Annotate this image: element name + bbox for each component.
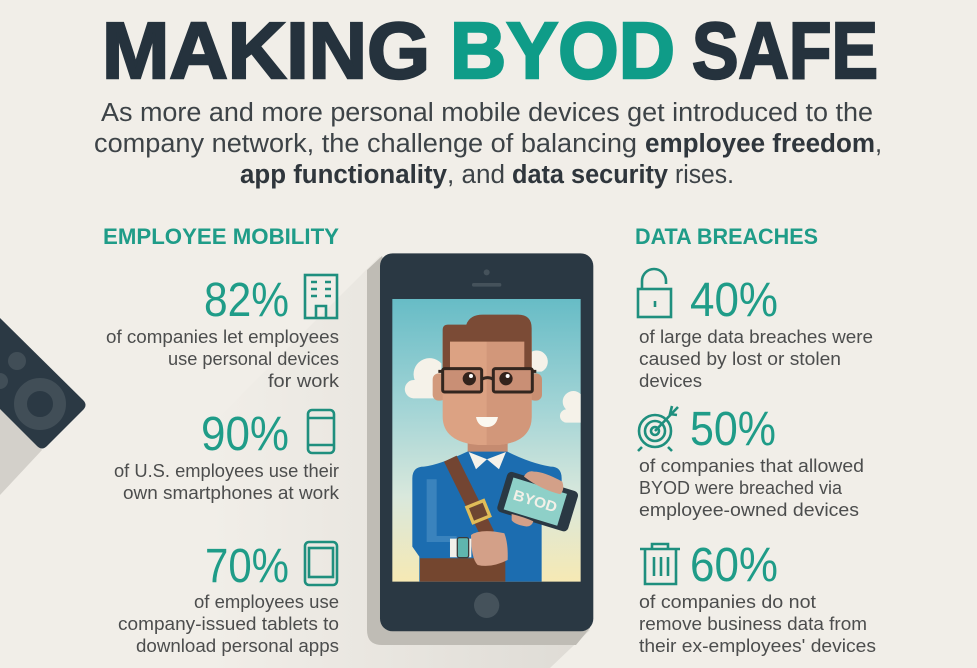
text: 70% description: company-issued tablets to: [118, 613, 339, 634]
smile: [476, 417, 498, 427]
stat: 40%: [638, 269, 873, 391]
hand and watch: [471, 531, 508, 566]
glasses: [438, 369, 536, 392]
heading: data breaches: DATA BREACHES: [635, 224, 818, 249]
stat: 50%: [638, 403, 864, 520]
text: 82% description: for work: [268, 370, 340, 391]
phone illustration: [380, 253, 593, 631]
intro text: app functionality: [240, 161, 448, 189]
stat: 90%: 90%: [201, 408, 289, 461]
text: 50% description: [639, 455, 864, 520]
text: 40% description: of large data breaches were: [639, 326, 873, 347]
strap: [444, 456, 494, 536]
text: 70% description: download personal apps: [136, 635, 339, 656]
sweater: [412, 452, 562, 582]
head: [443, 337, 532, 445]
shirt collar: [469, 452, 506, 469]
title: SAFE: [692, 6, 878, 95]
text: 70% description: of employees use: [194, 591, 339, 612]
hair: [443, 315, 532, 370]
text: 60% description: [639, 591, 876, 656]
small phone in hand: [496, 471, 579, 533]
text: 50% description: employee-owned devices: [639, 499, 859, 520]
phone long shadow: [210, 256, 590, 668]
intro text: rises.: [675, 161, 734, 189]
icon: tablet: [305, 542, 337, 585]
stat: 50%: 50%: [690, 403, 776, 456]
remote device: [0, 318, 86, 448]
text: 40% description: devices: [639, 370, 702, 391]
stat: 60%: [639, 539, 876, 656]
intro text: [94, 99, 882, 189]
stat: 82%: 82%: [204, 274, 289, 327]
text: 60% description: remove business data from: [639, 613, 867, 634]
remote device shadow: [0, 398, 42, 495]
icon: trash can: [640, 544, 680, 584]
intro text: company network, the challenge of balancing: [94, 130, 637, 158]
stat: 40%: 40%: [690, 274, 778, 327]
text: 60% description: their ex-employees' devices: [639, 635, 876, 656]
intro text: As more and more personal mobile devices get introduced to the: [101, 99, 873, 127]
text: 90% description: own smartphones at work: [123, 482, 340, 503]
stat: 82%: [106, 274, 340, 391]
text: 60% description: of companies do not: [639, 591, 816, 612]
icon: open padlock: [638, 269, 671, 317]
stat: 60%: 60%: [690, 539, 778, 592]
stat: 90%: [114, 408, 340, 503]
small phone in hand: BYOD: [511, 488, 559, 516]
icon: target with arrow: [638, 406, 678, 451]
intro text: employee freedom: [645, 130, 875, 158]
icon: office building: [305, 275, 337, 318]
text: 50% description: of companies that allowed: [639, 455, 864, 476]
text: 82% description: of companies let employees: [106, 326, 339, 347]
bag: [420, 558, 505, 582]
stat: 70%: [118, 540, 339, 656]
text: 82% description: [106, 326, 340, 391]
clouds: [405, 350, 581, 423]
intro text: ,: [875, 130, 882, 158]
text: 90% description: [114, 460, 340, 503]
intro text: , and: [447, 161, 505, 189]
heading: employee mobility: EMPLOYEE MOBILITY: [103, 224, 339, 249]
text: 70% description: [118, 591, 339, 656]
phone screen: [392, 299, 581, 582]
text: 40% description: caused by lost or stolen: [639, 348, 841, 369]
title: [102, 6, 878, 95]
phone contact shadow: [367, 256, 590, 645]
ears and neck: [433, 373, 446, 401]
title: BYOD: [450, 6, 675, 95]
stat: 70%: 70%: [205, 540, 289, 593]
intro text: data security: [512, 161, 669, 189]
title: MAKING: [102, 6, 430, 95]
text: 90% description: of U.S. employees use their: [114, 460, 339, 481]
icon: smartphone: [308, 410, 334, 453]
phone body: [380, 253, 593, 631]
strap buckle: [467, 501, 490, 523]
text: 82% description: use personal devices: [168, 348, 339, 369]
text: 40% description: [639, 326, 873, 391]
text: 50% description: BYOD were breached via: [639, 477, 843, 498]
